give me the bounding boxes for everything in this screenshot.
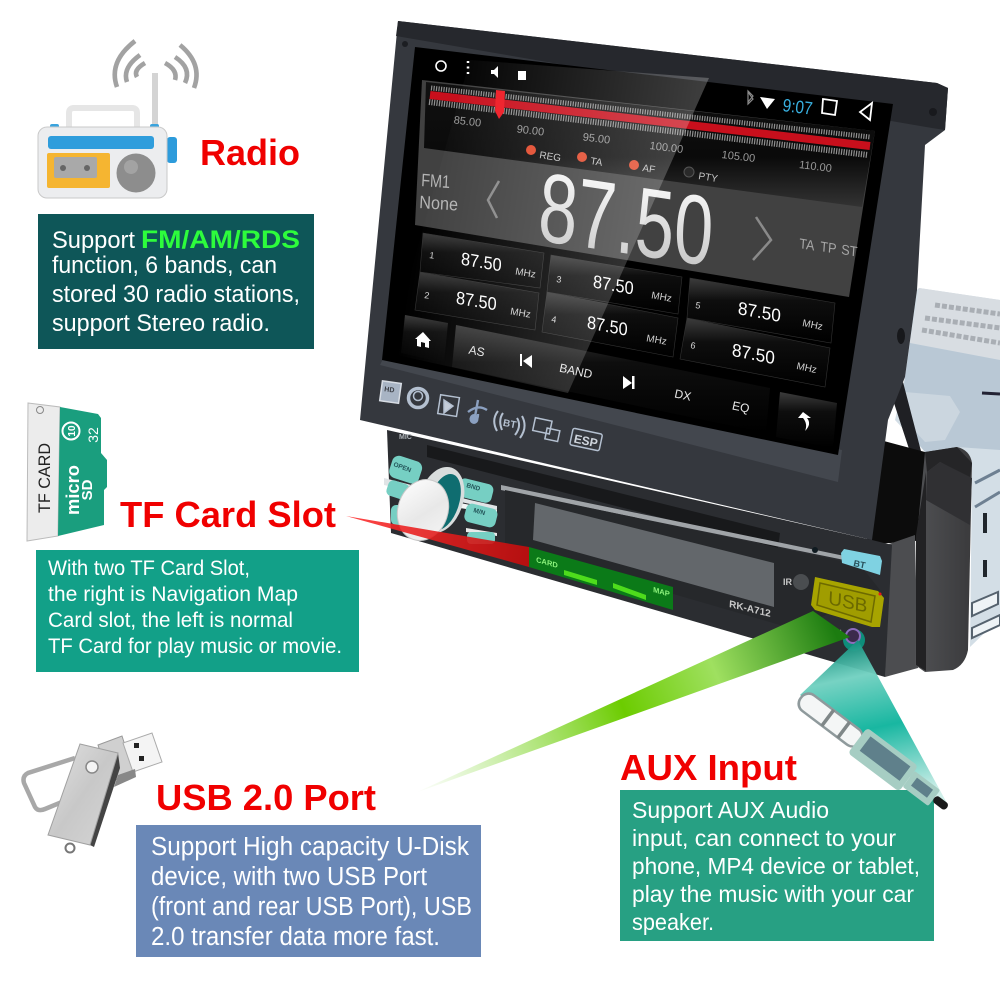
card slots panel — [529, 547, 673, 610]
preset buttons: 3 — [556, 274, 562, 285]
preset buttons: 87.50 — [586, 312, 628, 340]
panel: radio description: function, 6 bands, can — [52, 252, 277, 279]
panel: AUX description — [620, 790, 934, 941]
green pointer to USB port — [415, 611, 850, 793]
panel: AUX description: phone, MP4 device or tablet, — [632, 853, 920, 879]
panel: TF card description — [36, 550, 359, 672]
panel: AUX description: play the music with your car — [632, 881, 914, 907]
control buttons: BAND — [558, 361, 594, 381]
left control buttons and knob: BND — [465, 482, 481, 493]
MIC label: MIC — [399, 434, 412, 441]
preset buttons: MHz — [795, 361, 818, 376]
tuner readout: ST — [841, 241, 858, 260]
heading: Radio: Radio — [200, 132, 300, 173]
heading: USB 2.0 Port: USB 2.0 Port — [156, 777, 376, 818]
preset buttons: 87.50 — [731, 339, 776, 368]
icon: AUX plug — [790, 684, 957, 821]
feature icons row: ESP — [573, 432, 599, 450]
panel: TF card description: Card slot, the left is normal — [48, 609, 293, 632]
panel: radio description: Support — [52, 227, 135, 254]
radio frequency band — [415, 80, 875, 297]
panel: radio description — [38, 214, 314, 349]
panel: AUX description: Support AUX Audio — [632, 797, 829, 823]
card slots panel: CARD — [536, 555, 558, 570]
preset buttons: 87.50 — [460, 248, 502, 276]
preset buttons: 2 — [424, 290, 430, 301]
radio frequency band: TA — [590, 156, 603, 169]
preset buttons: 87.50 — [737, 298, 782, 326]
preset buttons: 5 — [695, 300, 701, 311]
status bar: 9:07 — [782, 95, 814, 119]
tuner readout: TA — [799, 235, 815, 254]
label: IR: IR — [783, 577, 793, 587]
metal chassis rear — [895, 288, 1000, 647]
panel: radio description: FM/AM/RDS — [141, 226, 300, 254]
preset buttons: MHz — [645, 333, 668, 348]
USB port highlight — [811, 577, 884, 627]
AUX jack — [824, 625, 865, 651]
icon: TF card: 32 — [85, 427, 101, 443]
heading: AUX Input: AUX Input — [620, 747, 797, 788]
teal pointer to AUX jack — [800, 640, 948, 805]
icon: TF card: micro — [63, 465, 83, 515]
feature icons row — [380, 381, 603, 451]
radio frequency band: AF — [642, 163, 656, 176]
control buttons: EQ — [731, 398, 751, 416]
radio frequency band: 110.00 — [798, 159, 832, 175]
panel: USB description: Support High capacity U-Disk — [151, 833, 469, 861]
red pointer to TF slots — [346, 516, 529, 567]
panel: radio description: support Stereo radio. — [52, 310, 270, 337]
preset buttons: 4 — [551, 314, 557, 325]
tuner readout: 87.50 — [536, 152, 716, 287]
radio frequency band: 95.00 — [582, 131, 611, 147]
panel: USB description: 2.0 transfer data more fast. — [151, 923, 440, 951]
screen bezel — [360, 21, 948, 540]
preset buttons: MHz — [801, 318, 824, 333]
BT button: BT — [853, 558, 867, 571]
control buttons: AS — [468, 343, 486, 359]
glass reflection — [388, 60, 709, 393]
radio frequency band: PTY — [698, 171, 719, 185]
radio frequency band: 85.00 — [453, 114, 482, 130]
left control buttons and knob: M/N — [472, 507, 486, 517]
feature icons row: HD — [384, 386, 395, 395]
radio frequency band: 90.00 — [516, 123, 545, 139]
panel: USB description: (front and rear USB Port), USB — [151, 893, 472, 921]
radio frequency band: 105.00 — [721, 149, 756, 165]
status bar — [436, 61, 872, 120]
icon: TF card: SD — [79, 479, 96, 500]
faceplate — [387, 430, 892, 677]
preset buttons: MHz — [514, 266, 536, 281]
panel: TF card description: With two TF Card Slot, — [48, 557, 250, 580]
side of faceplate — [885, 535, 918, 677]
left control buttons and knob — [384, 454, 499, 547]
BT button — [841, 549, 882, 575]
tuner readout: TP — [820, 238, 837, 257]
panel: AUX description: speaker. — [632, 909, 714, 935]
USB port highlight: USB — [828, 588, 868, 618]
label: model: RK-A712 — [729, 599, 771, 620]
panel: TF card description: TF Card for play music or movie. — [48, 635, 342, 658]
preset buttons: 87.50 — [592, 271, 634, 299]
preset buttons: MHz — [509, 306, 531, 321]
icon: USB stick — [24, 733, 162, 852]
control buttons: DX — [673, 387, 692, 404]
preset buttons: 1 — [429, 250, 435, 261]
control buttons — [401, 315, 837, 448]
icon: TF card: 10 — [67, 425, 78, 437]
AUX jack: AUX — [824, 625, 843, 638]
support arm — [893, 382, 922, 510]
label: IR — [783, 547, 818, 590]
icon: TF card: TF CARD — [35, 443, 54, 513]
panel: AUX description: input, can connect to your — [632, 825, 896, 851]
tuner readout: None — [419, 191, 459, 215]
display window — [533, 503, 774, 607]
rear black bracket — [915, 447, 972, 672]
panel: TF card description: the right is Navigation Map — [48, 583, 298, 606]
radio frequency band: REG — [539, 150, 562, 164]
feature icons row: BT — [502, 418, 517, 431]
tuner readout: FM1 — [421, 171, 451, 193]
screen — [382, 47, 893, 455]
tuner readout — [419, 152, 858, 287]
preset buttons: 6 — [690, 340, 696, 351]
preset buttons — [415, 233, 835, 387]
panel: USB description: device, with two USB Port — [151, 863, 427, 891]
heading: TF Card Slot: TF Card Slot — [120, 494, 336, 535]
preset buttons: 87.50 — [455, 287, 497, 315]
card slots panel: MAP — [653, 585, 670, 599]
panel: USB description — [136, 825, 481, 957]
left control buttons and knob: OPEN — [392, 461, 412, 474]
preset buttons: MHz — [650, 290, 673, 305]
panel: radio description: stored 30 radio stations, — [52, 281, 300, 308]
radio frequency band: 100.00 — [649, 140, 684, 156]
icon: TF card — [27, 403, 107, 541]
icon: radio — [38, 41, 197, 198]
dark recess behind hinge — [866, 440, 927, 545]
